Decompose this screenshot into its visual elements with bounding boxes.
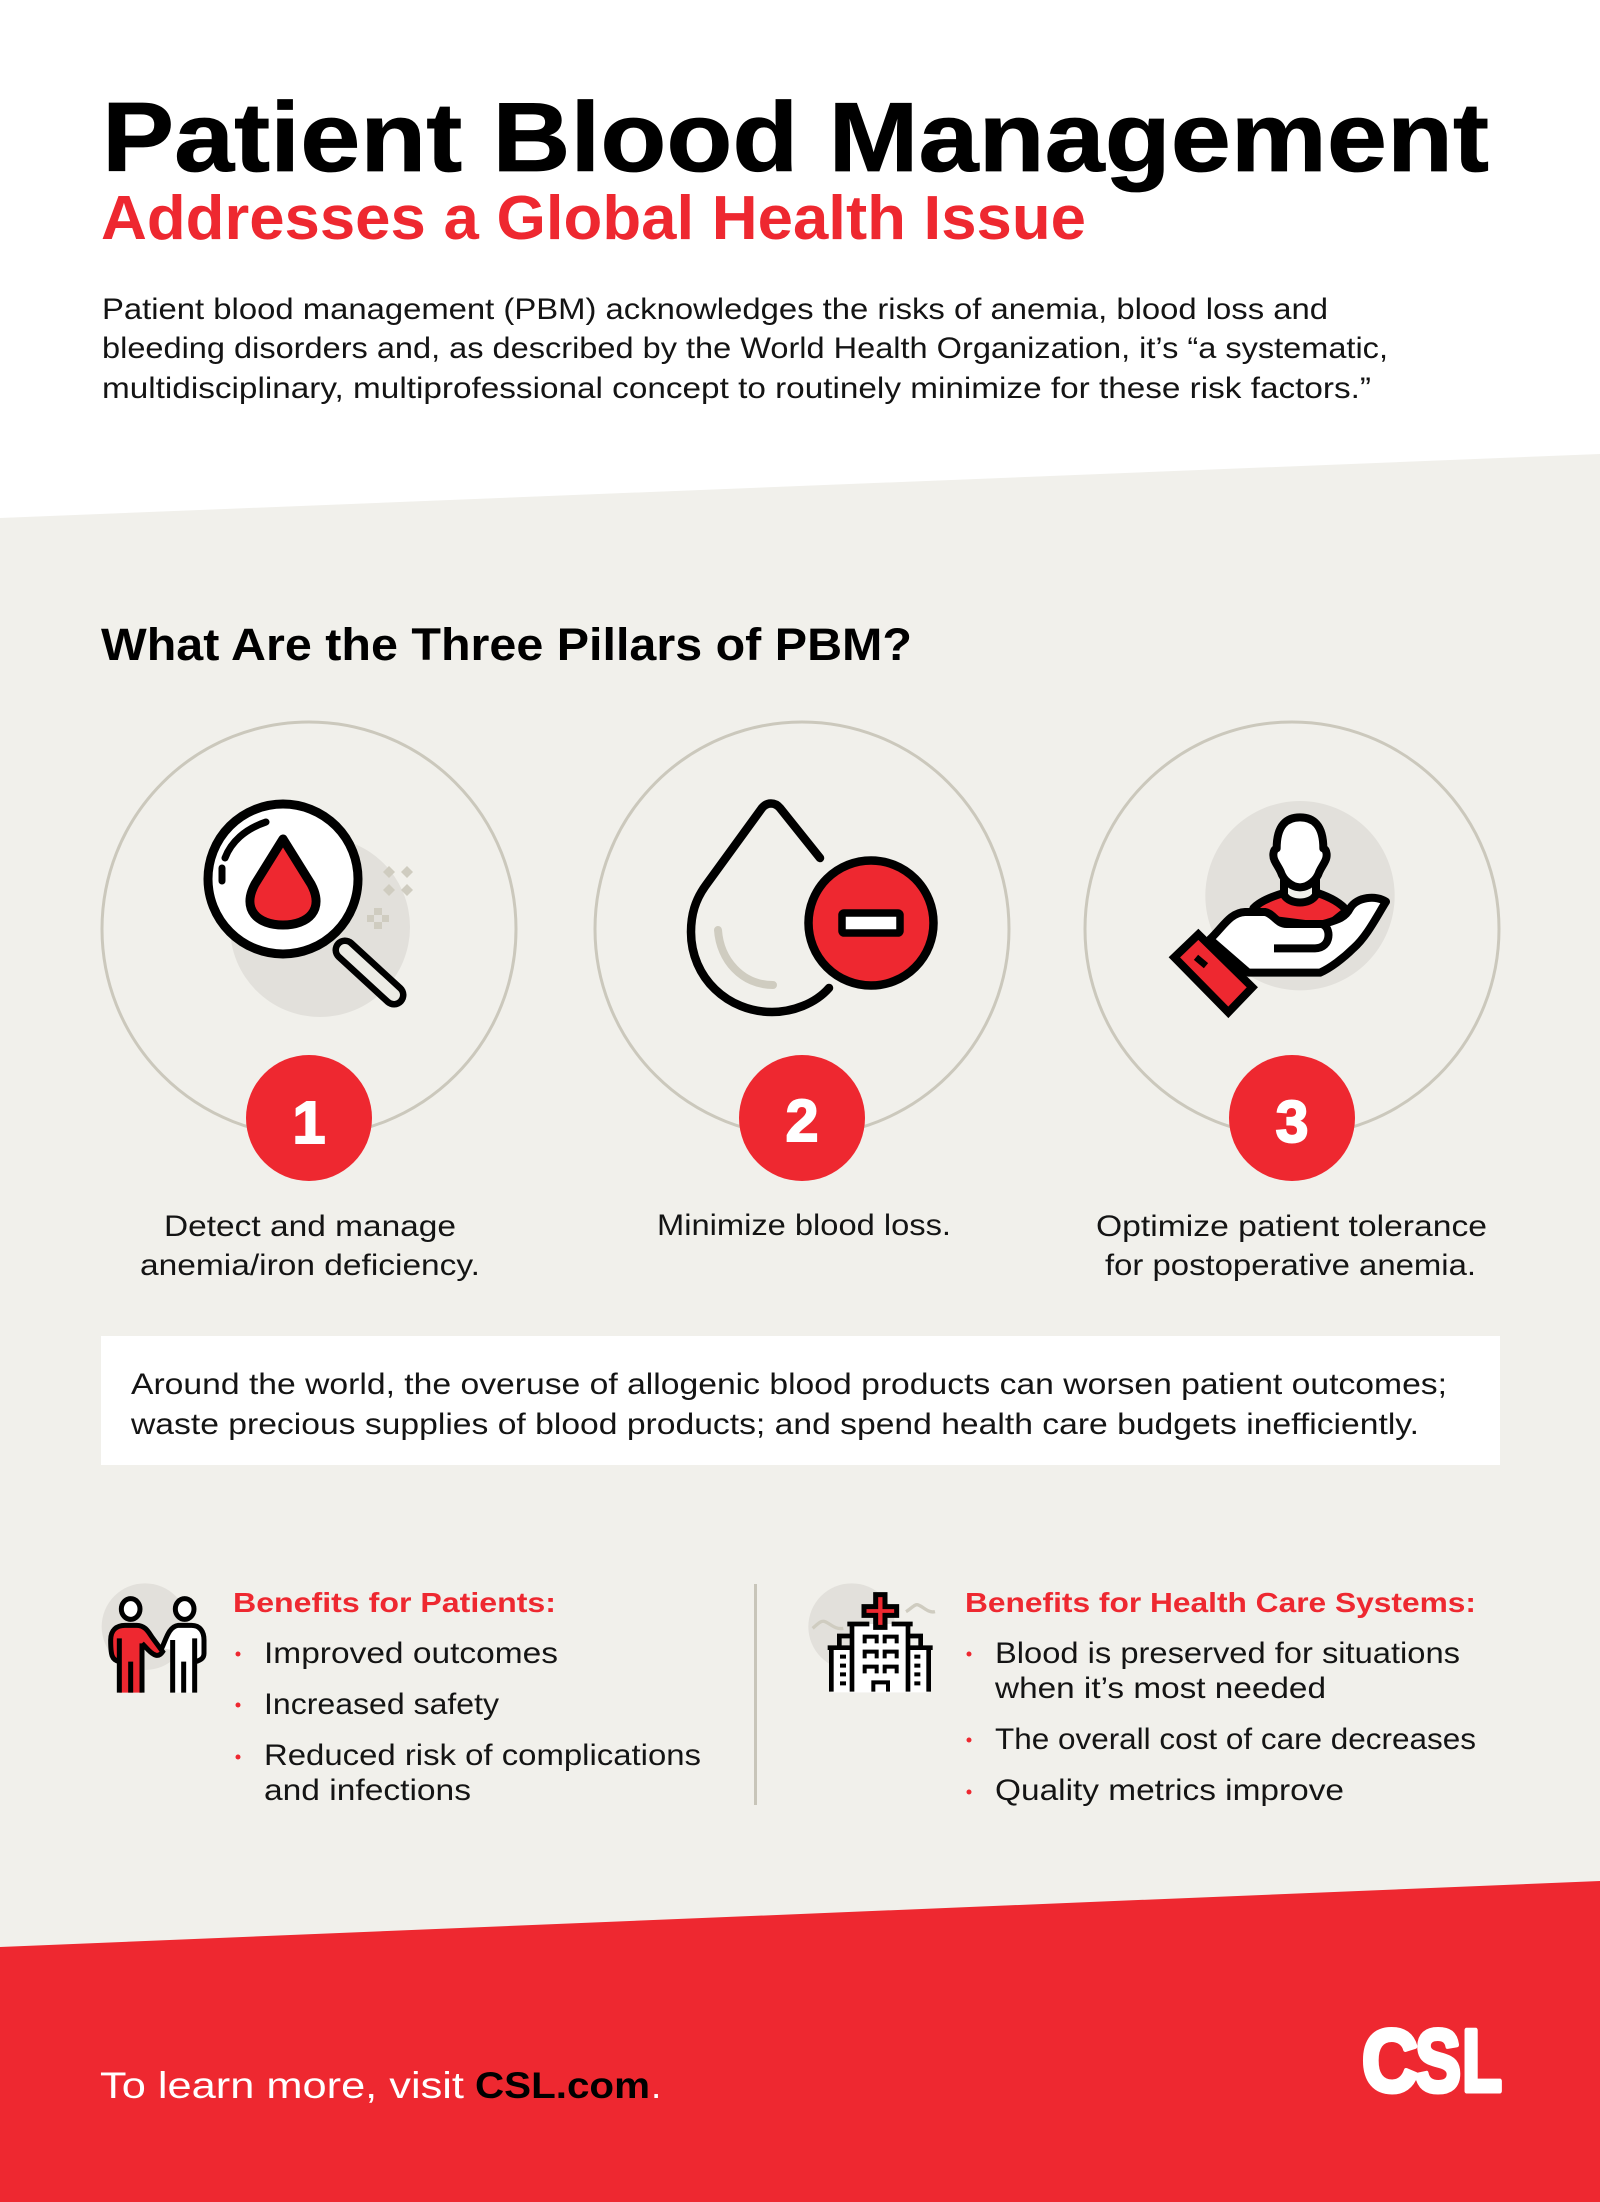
intro paragraph — [102, 293, 1388, 405]
icon: two people — [102, 1583, 204, 1693]
health care systems bullet list: Quality metrics improve — [995, 1774, 1344, 1807]
pillar 1 ring — [102, 722, 516, 1136]
background: beige section — [0, 454, 1600, 1960]
background: red footer band — [0, 1881, 1600, 2202]
number badge 3 — [1229, 1055, 1355, 1181]
icon: magnifying glass with blood drop — [208, 804, 413, 1017]
pillar 3 caption: for postoperative anemia. — [1105, 1249, 1476, 1282]
icon: blood drop with minus sign — [691, 804, 934, 1012]
pillar 1 caption: Detect and manage — [164, 1210, 456, 1243]
intro paragraph: Patient blood management (PBM) acknowledges the risks of anemia, blood loss and — [102, 293, 1328, 326]
icon: hand supporting a patient — [1174, 801, 1395, 1012]
section heading: What Are the Three Pillars of PBM? — [101, 619, 912, 670]
pillar 2 caption: Minimize blood loss. — [657, 1209, 951, 1242]
pillar 3 — [1085, 722, 1499, 1282]
CSL logo — [1362, 2011, 1502, 2110]
patients bullet list: Increased safety — [264, 1688, 499, 1721]
CSL logo: L — [1462, 2011, 1502, 2110]
number badge 2: 2 — [786, 1088, 818, 1154]
patients bullet list: and infections — [264, 1774, 471, 1807]
patients bullet list — [236, 1637, 701, 1807]
pillar 2 — [595, 722, 1009, 1242]
health care systems bullet list: when it’s most needed — [994, 1672, 1326, 1705]
patients heading: Benefits for Patients: — [233, 1587, 556, 1618]
icon: hospital — [808, 1583, 935, 1692]
CSL logo: C — [1362, 2011, 1418, 2110]
number badge 3: 3 — [1276, 1089, 1308, 1155]
subtitle: Addresses a Global Health Issue — [101, 184, 1086, 253]
number badge 1: 1 — [293, 1090, 325, 1156]
number badge 2 — [739, 1055, 865, 1181]
number badge 1 — [246, 1055, 372, 1181]
health care systems bullet list — [966, 1637, 1476, 1807]
callout box: Around the world, the overuse of allogenic blood products can worsen patient outcomes; — [131, 1368, 1447, 1401]
panel: benefits for health care systems — [808, 1583, 1476, 1807]
callout box — [101, 1336, 1500, 1465]
health care systems bullet list: Blood is preserved for situations — [995, 1637, 1460, 1670]
pillar 1 caption: anemia/iron deficiency. — [140, 1249, 480, 1282]
health care systems bullet list: The overall cost of care decreases — [995, 1723, 1476, 1756]
footer call to action: . — [651, 2065, 661, 2106]
footer call to action: CSL.com — [475, 2065, 650, 2106]
patients bullet list: Reduced risk of complications — [264, 1739, 701, 1772]
panel: benefits for patients — [102, 1583, 701, 1807]
intro paragraph: bleeding disorders and, as described by the World Health Organization, it’s “a systematic, — [102, 332, 1388, 365]
pillar 3 caption — [1096, 1210, 1487, 1282]
title: Patient Blood Management — [102, 82, 1489, 192]
pillar 1 caption — [140, 1210, 480, 1282]
intro paragraph: multidisciplinary, multiprofessional concept to routinely minimize for these risk factors.” — [102, 372, 1371, 405]
patients bullet list: Improved outcomes — [264, 1637, 558, 1670]
pillar 2 ring — [595, 722, 1009, 1136]
CSL logo: S — [1415, 2011, 1461, 2110]
pillar 3 ring — [1085, 722, 1499, 1136]
pillar 1 — [102, 722, 516, 1282]
footer call to action: To learn more, visit — [100, 2065, 465, 2106]
footer call to action — [100, 2065, 661, 2106]
pillar 3 caption: Optimize patient tolerance — [1096, 1210, 1487, 1243]
health care systems heading: Benefits for Health Care Systems: — [965, 1587, 1476, 1618]
callout box: waste precious supplies of blood products; and spend health care budgets inefficiently. — [130, 1408, 1419, 1441]
